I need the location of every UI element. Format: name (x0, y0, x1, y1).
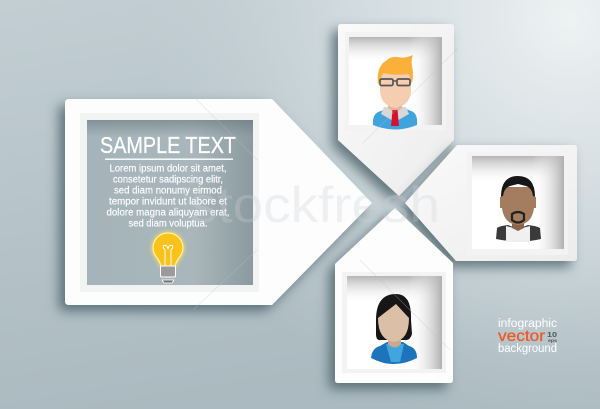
white photo box (347, 276, 442, 369)
arrow frame pointing down (338, 24, 454, 196)
logo: infographic vector background: 10 (547, 330, 557, 339)
arrow frame pointing up (335, 208, 453, 383)
body text: sed diam voluptua. (128, 218, 208, 230)
inner frame (345, 32, 446, 130)
logo: infographic vector background: eps (548, 338, 558, 343)
icon: man with glasses and tie (373, 55, 417, 130)
gray text panel (87, 120, 253, 285)
body text: Lorem ipsum dolor sit amet, (110, 164, 226, 174)
body text: sed diam nonumy eirmod (114, 186, 222, 196)
arrow frame pointing left (405, 145, 577, 261)
inner frame (467, 152, 568, 255)
logo: infographic vector background: infographic (498, 318, 557, 330)
icon: man with goatee (496, 176, 541, 242)
logo: infographic vector background (498, 318, 558, 355)
white photo box (472, 156, 564, 249)
logo: infographic vector background: vector (498, 328, 545, 345)
heading: sample text: SAMPLE TEXT (100, 132, 236, 158)
panel: left arrow text box (65, 99, 372, 305)
body text: tempor invidunt ut labore et (109, 196, 227, 208)
logo: infographic vector background: background (498, 343, 557, 355)
arrow frame (65, 99, 372, 305)
body text: consetetur sadipscing elitr, (113, 174, 223, 186)
body text (106, 164, 230, 230)
watermark: stockfresh (190, 177, 440, 233)
panel: bottom person box (335, 208, 453, 383)
panel: right person box (405, 145, 577, 261)
icon: woman with black hair (371, 294, 417, 364)
heading underline (105, 158, 233, 160)
panel: top person box (338, 24, 454, 196)
white photo box (349, 37, 442, 125)
inner frame (80, 113, 259, 292)
inner frame (342, 272, 446, 373)
icon: light bulb (152, 232, 184, 283)
body text: dolore magna aliquyam erat, (106, 208, 230, 218)
